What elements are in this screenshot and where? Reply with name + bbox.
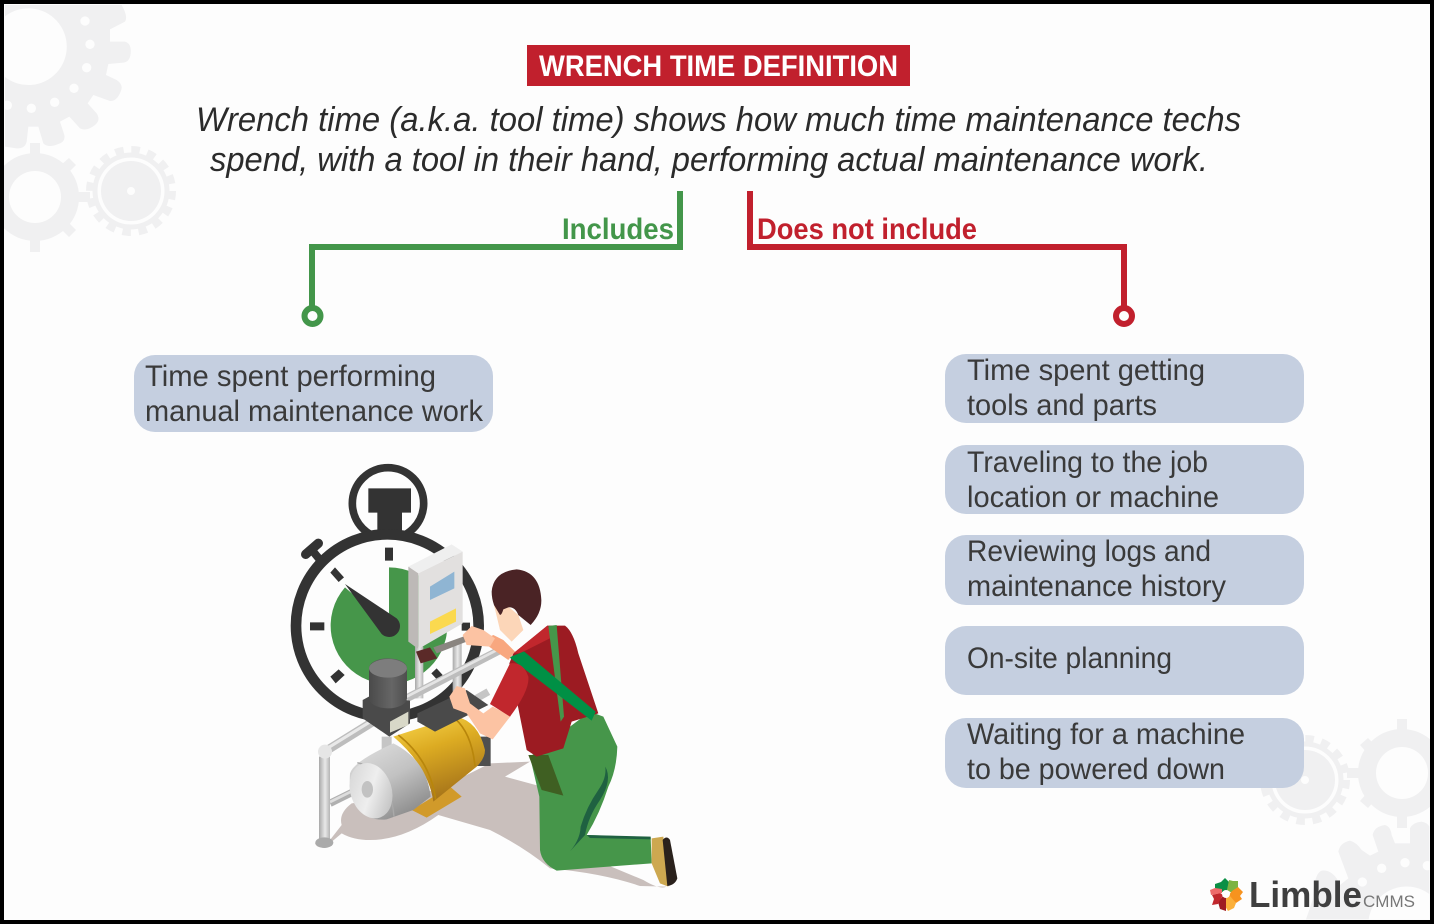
control panel on posts xyxy=(408,544,463,698)
shirt xyxy=(509,626,598,757)
panel: excluded item, tools and parts: tools and parts xyxy=(967,389,1157,422)
panel: excluded item, traveling: Traveling to the job xyxy=(967,446,1208,479)
panel: included item: manual maintenance work xyxy=(145,395,484,428)
illustration: technician at pump with stopwatch xyxy=(296,468,677,887)
head xyxy=(494,605,523,642)
panel: excluded item, waiting xyxy=(945,718,1304,788)
valve xyxy=(363,658,410,737)
logo: Limble CMMS: Limble xyxy=(1249,874,1362,915)
panel: excluded item, reviewing logs xyxy=(945,535,1304,605)
arms xyxy=(483,635,515,660)
stopwatch xyxy=(296,468,479,717)
panel: excluded item, tools and parts xyxy=(945,354,1304,423)
wrench xyxy=(416,635,467,663)
panel: excluded item, waiting: Waiting for a machine xyxy=(967,718,1245,751)
panel: excluded item, traveling: location or machine xyxy=(967,481,1219,514)
bracket: includes: Includes xyxy=(562,213,674,246)
bracket: does not include: Does not include xyxy=(757,213,977,246)
bracket: does not include xyxy=(750,191,1132,324)
logo: Limble CMMS xyxy=(1210,874,1415,915)
pump motor xyxy=(343,717,491,824)
logo mark xyxy=(1210,878,1243,911)
pipework xyxy=(315,647,503,848)
panel: included item: Time spent performing xyxy=(145,360,436,393)
technician xyxy=(449,569,677,887)
panel: included item xyxy=(134,355,493,432)
title: WRENCH TIME DEFINITION xyxy=(539,50,898,83)
panel: excluded item, tools and parts: Time spent getting xyxy=(967,354,1205,387)
definition text: Wrench time (a.k.a. tool time) shows how much time maintenance techs xyxy=(196,101,1241,139)
logo: Limble CMMS: CMMS xyxy=(1363,892,1415,911)
bracket: includes xyxy=(304,191,680,324)
decorative gears: top left xyxy=(3,5,172,252)
panel: excluded item, on-site planning: On-site planning xyxy=(967,642,1172,675)
overalls xyxy=(530,712,652,871)
decorative gears: bottom right xyxy=(1264,719,1432,919)
panel: excluded item, traveling xyxy=(945,445,1304,514)
panel: excluded item, waiting: to be powered down xyxy=(967,753,1225,786)
panel: excluded item, on-site planning xyxy=(945,626,1304,695)
definition text xyxy=(196,101,1241,179)
definition text: spend, with a tool in their hand, performing actual maintenance work. xyxy=(210,141,1208,179)
boot xyxy=(652,837,668,887)
panel: excluded item, reviewing logs: maintenance history xyxy=(967,570,1226,603)
panel: excluded item, reviewing logs: Reviewing logs and xyxy=(967,535,1211,568)
block under hand xyxy=(417,690,488,732)
floor shadow xyxy=(315,762,667,887)
